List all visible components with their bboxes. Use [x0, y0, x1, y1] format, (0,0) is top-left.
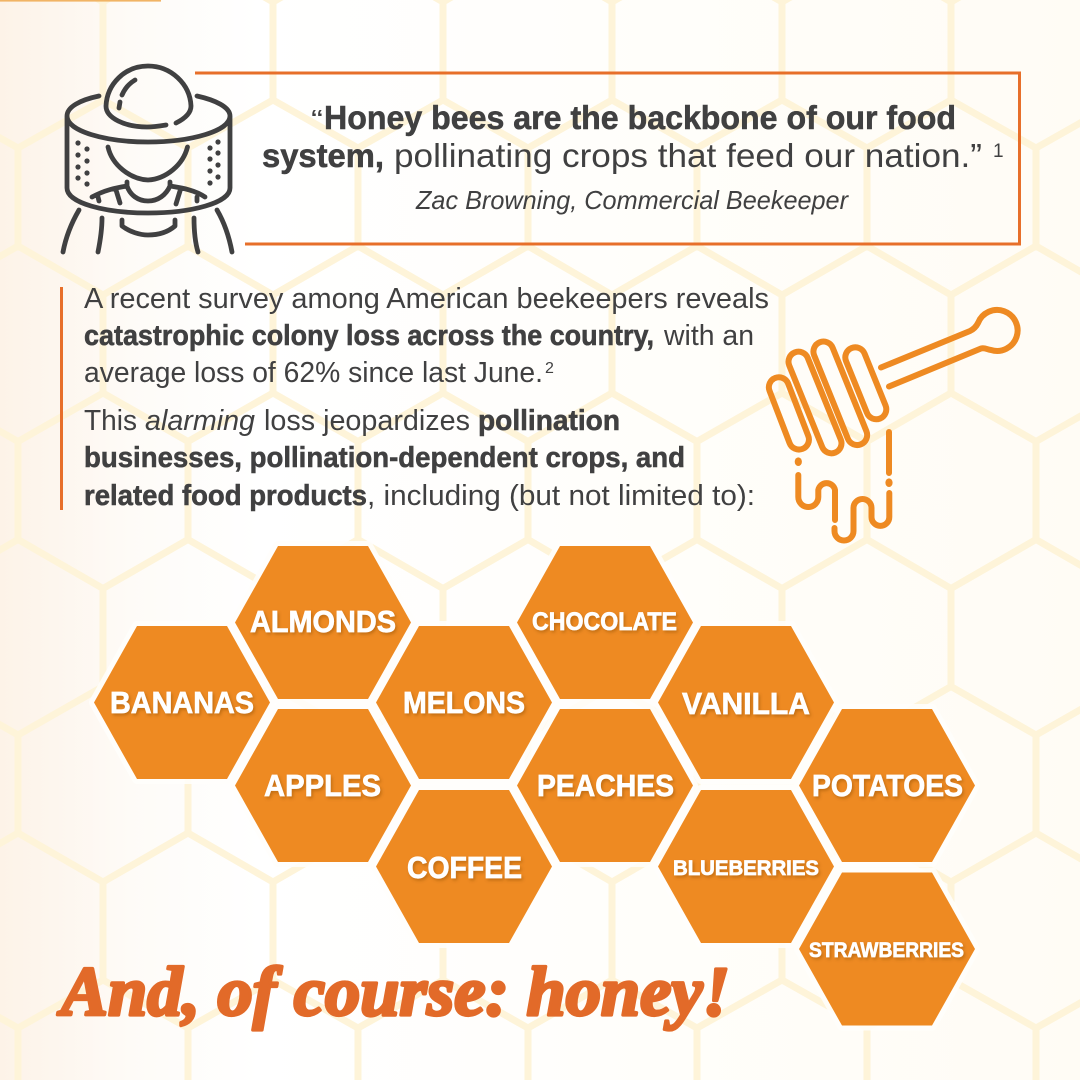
quote text: pollinating crops that feed our nation.” [394, 137, 982, 174]
hat dome [106, 66, 191, 127]
hexagon: potatoes [799, 709, 975, 862]
body text: survey finding: average loss of 62% since last June. [84, 357, 543, 389]
closing headline: And, of course: honey! [57, 954, 730, 1031]
body text: alarming loss [84, 405, 755, 512]
quote text: “ [311, 104, 323, 134]
quote text: system, [262, 137, 384, 174]
quote text [262, 99, 1004, 174]
hexagon: melons [376, 626, 552, 779]
body text: survey finding: 2 [545, 360, 554, 377]
veil cylinder [67, 96, 230, 213]
dipper handle [881, 310, 1018, 386]
body text: survey finding: with an [663, 320, 754, 352]
hexagon: strawberries: STRAWBERRIES [809, 939, 964, 962]
hexagon: peaches [517, 709, 693, 862]
body text: alarming loss: loss jeopardizes [264, 405, 470, 437]
hexagon: strawberries [799, 872, 975, 1026]
icon: beekeeper in veiled hat [63, 66, 232, 252]
hexagon: vanilla: VANILLA [682, 686, 810, 721]
hexagon: coffee: COFFEE [407, 850, 522, 885]
hexagon: chocolate: CHOCOLATE [532, 608, 677, 636]
collar and shoulders [92, 182, 205, 204]
dome highlight [119, 80, 135, 108]
body text: alarming loss: alarming [145, 405, 255, 437]
quote frame [195, 73, 1020, 244]
honey drips [798, 432, 889, 540]
quote text: Honey bees are the backbone of our food [324, 99, 956, 136]
veil mesh dots [75, 139, 221, 187]
icon: honey dipper with drips [766, 310, 1018, 540]
hexagon: blueberries: BLUEBERRIES [673, 857, 819, 880]
body accent bar [60, 287, 63, 510]
honey droplets [795, 457, 893, 487]
body text: survey finding [84, 283, 769, 389]
hexagon: apples: APPLES [264, 768, 381, 803]
quote attribution: Zac Browning, Commercial Beekeeper [415, 185, 849, 215]
hexagon: chocolate [517, 546, 693, 699]
hexagon: apples [235, 709, 411, 862]
hexagon: melons: MELONS [403, 685, 525, 720]
body text: alarming loss: businesses, pollination-dependent crops, and [84, 442, 685, 474]
hexagon: bananas: BANANAS [110, 685, 254, 720]
body text: alarming loss: pollination [478, 405, 620, 437]
body text: survey finding: A recent survey among American beekeepers reveals [84, 283, 769, 315]
hexagon: bananas [94, 626, 270, 779]
crop hexagons [94, 546, 975, 1026]
hexagon: almonds: ALMONDS [250, 604, 396, 639]
hexagon: almonds [235, 546, 411, 699]
chest and drape lines [63, 210, 232, 252]
hexagon: potatoes: POTATOES [812, 768, 963, 803]
hexagon: vanilla [658, 626, 834, 779]
face [108, 147, 188, 180]
dipper head slats [766, 339, 889, 456]
body text: alarming loss: , including (but not limited to): [367, 480, 755, 512]
hexagon: coffee [376, 790, 552, 943]
quote text: 1 [993, 141, 1004, 162]
body text: alarming loss: related food products [84, 480, 367, 512]
top edge accent line [0, 0, 161, 2]
body text: alarming loss: This [84, 405, 137, 437]
hexagon: blueberries [658, 790, 834, 943]
gap fill around crop hexagons [94, 546, 975, 1026]
body text: survey finding: catastrophic colony loss across the country, [84, 320, 654, 352]
hexagon: peaches: PEACHES [537, 768, 674, 803]
